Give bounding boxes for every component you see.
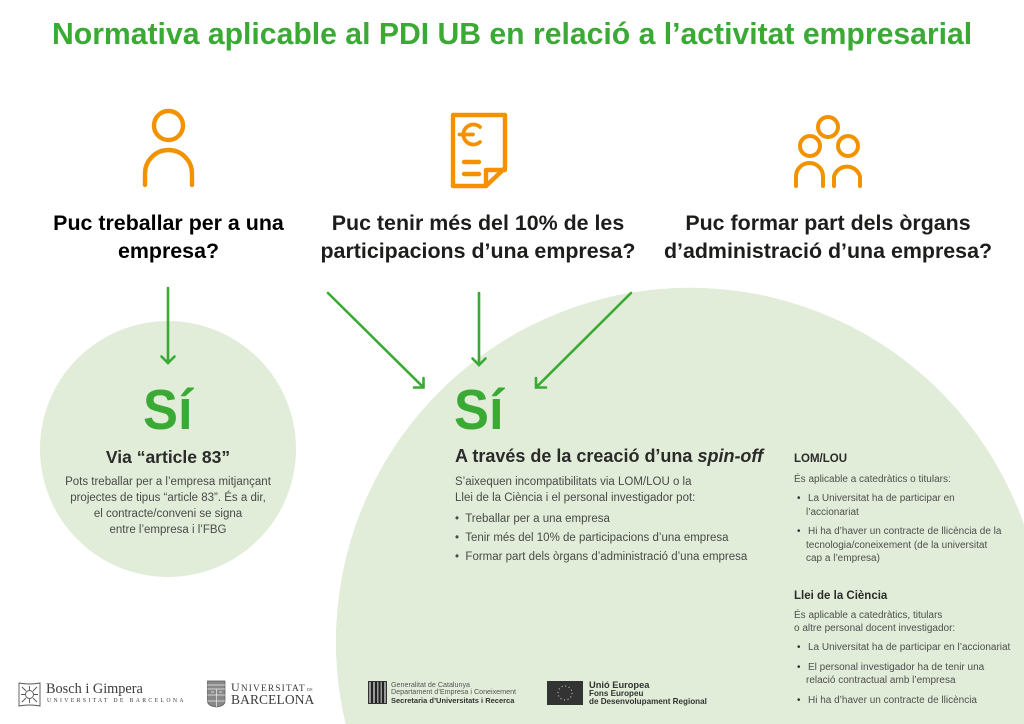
question 2: Puc tenir més del 10% de les xyxy=(332,211,624,235)
logo: Universitat de Barcelona: BARCELONA xyxy=(231,692,314,706)
question 3: Puc formar part dels òrgans xyxy=(685,211,971,235)
spin-off list xyxy=(455,513,748,563)
article 83 description xyxy=(65,476,271,536)
title: Normativa aplicable al PDI UB en relació a l’activitat empresarial xyxy=(52,18,972,51)
LOM/LOU list xyxy=(797,493,1002,564)
LOM/LOU list: cap a l’empresa) xyxy=(806,553,880,564)
question 1: Puc treballar per a una xyxy=(53,211,284,235)
logo: Universitat de Barcelona xyxy=(207,680,314,708)
logo: Generalitat de Catalunya: Departament d’Empresa i Coneixement xyxy=(391,688,516,696)
logo: Universitat de Barcelona: UNIVERSITAT DE xyxy=(231,680,313,694)
Llei de la Ciència heading: Llei de la Ciència xyxy=(794,590,887,602)
logo: Unió Europea: de Desenvolupament Regional xyxy=(589,697,707,706)
logo: Unió Europea xyxy=(547,680,707,706)
Llei de la Ciència list: relació contractual amb l’empresa xyxy=(806,675,956,686)
LOM/LOU intro: És aplicable a catedràtics o titulars: xyxy=(794,474,951,485)
text: • xyxy=(797,694,801,706)
Sí heading left: Sí xyxy=(143,378,193,442)
question 3 xyxy=(664,211,992,262)
logo: Bosch i Gimpera: Bosch i Gimpera xyxy=(46,681,143,697)
Llei de la Ciència list: El personal investigador ha de tenir una xyxy=(808,662,984,672)
LOM/LOU list: l’accionariat xyxy=(806,506,859,518)
article 83 description: projectes de tipus “article 83”. És a dir, xyxy=(70,492,266,504)
Llei de la Ciència intro xyxy=(794,609,955,634)
logo: Generalitat de Catalunya: Secretaria d’Universitats i Recerca xyxy=(391,696,514,705)
logo: Bosch i Gimpera: UNIVERSITAT DE BARCELONA xyxy=(47,698,186,704)
subheading: article 83: Via “article 83” xyxy=(106,447,230,467)
logo: Unió Europea: Fons Europeu xyxy=(589,689,643,698)
spin-off intro text: S’aixequen incompatibilitats via LOM/LOU o la xyxy=(455,476,692,488)
question 3: d’administració d’una empresa? xyxy=(664,238,992,262)
spin-off list: • Tenir més del 10% de participacions d’una empresa xyxy=(455,532,729,544)
question 1 xyxy=(53,211,284,262)
logo: Bosch i Gimpera xyxy=(18,681,186,706)
LOM/LOU list: Hi ha d’haver un contracte de llicència de la xyxy=(808,526,1001,537)
Llei de la Ciència list: Hi ha d’haver un contracte de llicència xyxy=(808,694,977,706)
text: • xyxy=(797,662,801,672)
LOM/LOU heading: LOM/LOU xyxy=(794,453,847,465)
question 1: empresa? xyxy=(118,238,219,262)
Llei de la Ciència list: La Universitat ha de participar en l’accionariat xyxy=(808,642,1010,653)
text: • xyxy=(797,642,801,653)
LOM/LOU list: La Universitat ha de participar en xyxy=(808,493,955,504)
article 83 description: entre l’empresa i l’FBG xyxy=(110,524,226,536)
spin-off intro text: Llei de la Ciència i el personal investigador pot: xyxy=(455,492,695,504)
spin-off list: • Formar part dels òrgans d’administració d’una empresa xyxy=(455,551,747,563)
subheading: spin-off: A través de la creació d’una spin-off xyxy=(455,446,763,466)
Llei de la Ciència intro: És aplicable a catedràtics, titulars xyxy=(794,610,942,620)
article 83 description: el contracte/conveni se signa xyxy=(94,508,242,520)
text: • xyxy=(797,493,801,504)
logo: Generalitat de Catalunya xyxy=(368,680,516,705)
Llei de la Ciència list xyxy=(797,642,1010,706)
question 2 xyxy=(320,211,636,262)
article 83 description: Pots treballar per a l’empresa mitjançant xyxy=(65,476,271,488)
Sí heading right: Sí xyxy=(454,378,504,442)
logo: Unió Europea: Unió Europea xyxy=(589,680,649,690)
logo: Generalitat de Catalunya: Generalitat de Catalunya xyxy=(391,680,470,688)
question 2: participacions d’una empresa? xyxy=(320,238,636,262)
spin-off intro text xyxy=(455,476,695,504)
spin-off list: • Treballar per a una empresa xyxy=(455,513,610,525)
text: • xyxy=(797,526,801,537)
small background circle xyxy=(40,321,296,577)
Llei de la Ciència intro: o altre personal docent investigador: xyxy=(794,623,955,634)
LOM/LOU list: tecnologia/coneixement (de la universitat xyxy=(806,540,987,550)
